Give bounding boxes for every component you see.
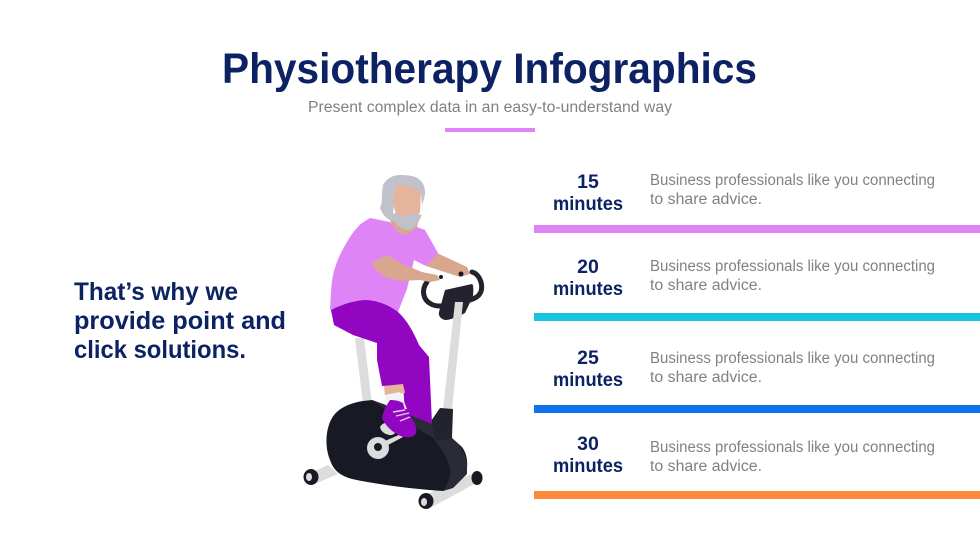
row 2: 20 minutes: Business professionals like you connecting: [650, 258, 935, 275]
row 3: 25 minutes: [534, 347, 980, 413]
left statement text: provide point and: [74, 307, 286, 335]
hand grips: [439, 272, 464, 279]
shirt: [330, 218, 438, 312]
row 4: 30 minutes: Business professionals like you connecting: [650, 439, 935, 456]
title: Physiotherapy Infographics: [222, 45, 757, 93]
pedal crank: [367, 423, 403, 459]
title accent bar: [445, 128, 535, 132]
row 4: 30 minutes: to share advice.: [650, 458, 762, 475]
neck and face: [390, 185, 421, 235]
row 1: 15 minutes: to share advice.: [650, 191, 762, 208]
row 4: 30 minutes: minutes: [553, 455, 623, 477]
bike feet: [304, 465, 482, 509]
row 2: 20 minutes: to share advice.: [650, 277, 762, 294]
near arm: [371, 255, 440, 282]
row 3: 25 minutes: Business professionals like you connecting: [650, 350, 935, 367]
row 1: 15 minutes: [534, 171, 980, 233]
row 2: 20 minutes: minutes: [553, 278, 623, 300]
far arm: [426, 253, 470, 277]
trousers: [331, 300, 432, 424]
shoe: [382, 400, 416, 437]
row 4: 30 minutes: [534, 433, 980, 499]
hair and beard: [380, 175, 425, 230]
left statement text: click solutions.: [74, 336, 246, 364]
left statement text: That’s why we: [74, 278, 238, 306]
row 2: 20 minutes: 20: [577, 256, 599, 278]
subtitle: Present complex data in an easy-to-understand way: [308, 99, 672, 116]
row 1: 15 minutes: Business professionals like you connecting: [650, 172, 935, 189]
row 3: 25 minutes: minutes: [553, 369, 623, 391]
row 3: 25 minutes: 25: [577, 347, 599, 369]
ankle and sock: [384, 384, 407, 411]
seat and handle posts: [355, 302, 463, 410]
row 4: 30 minutes: 30: [577, 433, 599, 455]
row 1: 15 minutes: 15: [577, 171, 599, 193]
row 3: 25 minutes: to share advice.: [650, 369, 762, 386]
left statement text: [74, 278, 286, 364]
row 1: 15 minutes: minutes: [553, 193, 623, 215]
row 2: 20 minutes: [534, 256, 980, 321]
handlebar and console: [424, 272, 482, 320]
illustration: man on exercise bike: [304, 175, 482, 509]
bike flywheel housing: [326, 400, 467, 491]
